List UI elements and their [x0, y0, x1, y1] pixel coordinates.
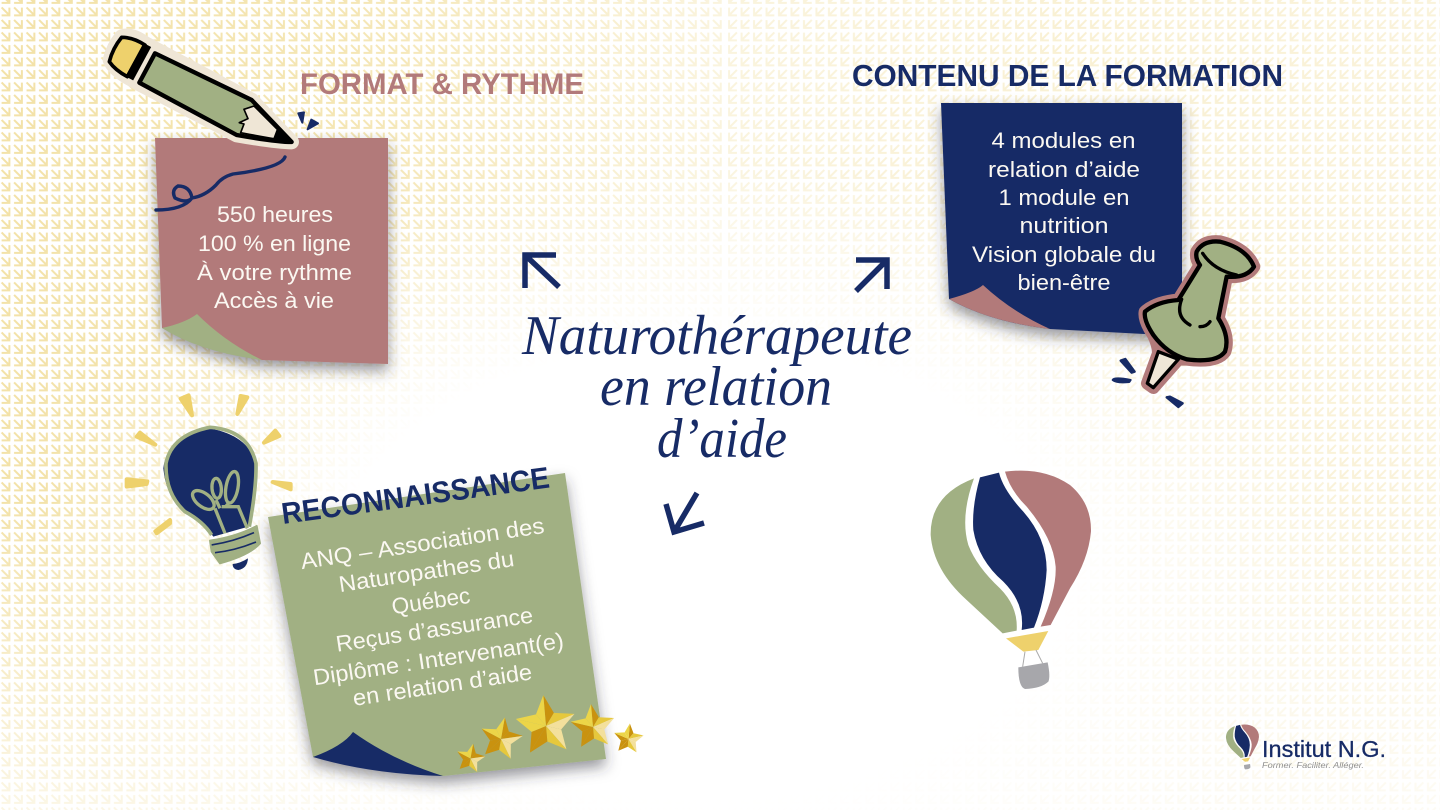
logo tagline: Former. Faciliter. Alléger. — [1262, 760, 1364, 770]
panel: format et rythme — [155, 138, 388, 364]
star 4 — [569, 702, 616, 747]
icon: push pin — [1113, 241, 1254, 407]
star 2 — [477, 714, 525, 760]
note text: Vision globale du — [972, 242, 1156, 267]
icon: five gold stars — [454, 693, 645, 773]
logo: Institut N.G. — [1226, 724, 1386, 770]
scribble line — [156, 157, 285, 210]
note text: ANQ – Association des — [299, 513, 546, 574]
page curl: rose — [949, 285, 1050, 329]
note text: Diplôme : Intervenant(e) — [311, 628, 565, 690]
note text: Québec — [390, 583, 472, 619]
logo name: Institut N.G. — [1262, 736, 1386, 762]
logo balloon — [1226, 724, 1259, 769]
note text: relation d’aide — [988, 157, 1140, 182]
center title: d’aide — [657, 408, 787, 470]
heading: contenu de la formation: CONTENU DE LA FORMATION — [852, 58, 1283, 93]
icon: hot air balloon — [931, 471, 1091, 689]
panel: reconnaissance — [268, 473, 606, 776]
note text: bien-être — [1018, 270, 1110, 295]
sticky note: navy — [941, 103, 1182, 336]
arrow: up-right — [856, 260, 887, 291]
star 1 — [454, 741, 487, 773]
arrow: down-left — [666, 493, 704, 532]
note text: 1 module en — [998, 185, 1130, 210]
note text: Reçus d’assurance — [334, 603, 535, 657]
note text — [972, 128, 1156, 295]
note text: 550 heures — [217, 202, 333, 227]
heading: reconnaissance: RECONNAISSANCE — [279, 462, 551, 531]
panel: contenu de la formation — [941, 103, 1182, 336]
center title: en relation — [600, 356, 832, 418]
star 5 — [613, 722, 645, 753]
page curl: green — [162, 314, 262, 360]
sticky note: rose — [155, 138, 388, 364]
note text — [197, 202, 352, 313]
note text: en relation d’aide — [351, 659, 534, 711]
center title: Naturothérapeute — [521, 305, 912, 367]
heading: format et rythme: FORMAT & RYTHME — [300, 68, 584, 101]
note text: Naturopathes du — [337, 546, 516, 597]
arrow: up-left — [525, 255, 559, 288]
sticky note: green — [268, 473, 606, 776]
note text: À votre rythme — [197, 260, 352, 285]
note text — [299, 513, 565, 711]
star 3 — [514, 693, 578, 754]
center title — [521, 305, 912, 470]
note text: 100 % en ligne — [198, 231, 351, 256]
note text: Accès à vie — [214, 288, 334, 313]
icon: light bulb — [127, 395, 291, 570]
page curl: navy — [313, 732, 443, 776]
note text: 4 modules en — [992, 128, 1136, 153]
icon: pencil — [109, 36, 318, 143]
note text: nutrition — [1020, 213, 1108, 238]
